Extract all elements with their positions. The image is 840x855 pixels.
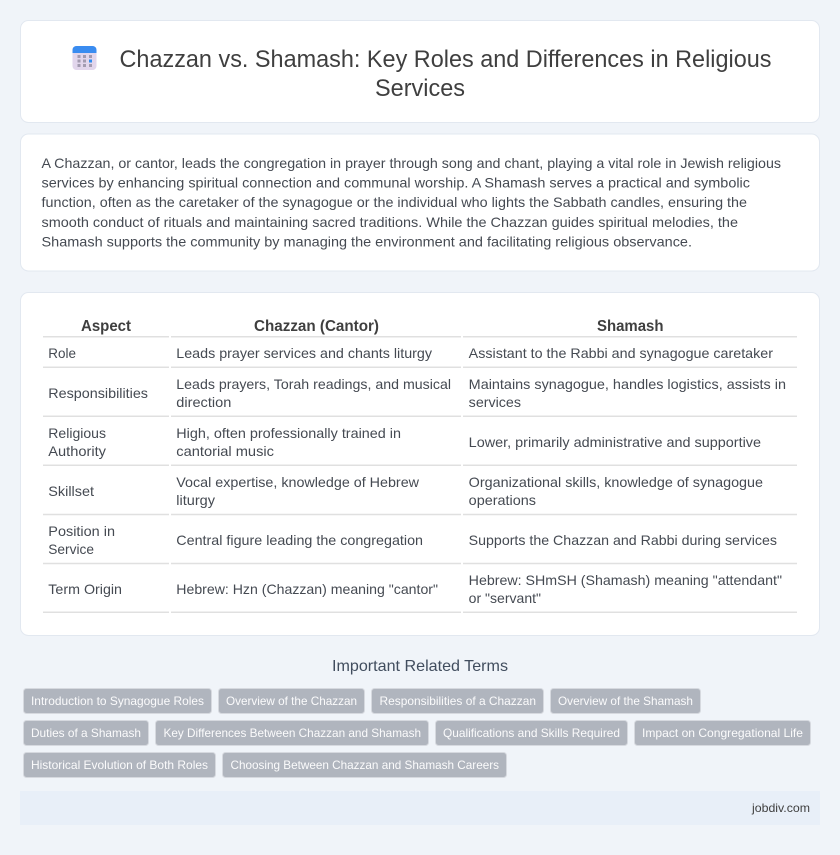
- summary text: smooth conduct of rituals and maintaining sacred traditions. While the Chazzan guides spiritual melodies, the: [42, 214, 738, 230]
- summary text: A Chazzan, or cantor, leads the congregation in prayer through song and chant, playing a vital role in Jewish religious: [42, 155, 781, 171]
- row: religious authority: Authority: [48, 443, 106, 459]
- related term chips: Historical Evolution of Both Roles: [31, 758, 208, 772]
- related term chips: Overview of the Shamash: [558, 694, 693, 708]
- row: religious authority: cantorial music: [176, 443, 274, 459]
- panel: title header: [20, 20, 820, 122]
- row: skillset: Skillset: [48, 483, 94, 499]
- summary text: Shamash supports the community by managing the environment and facilitating religious observance.: [42, 233, 692, 249]
- summary text: function, often as the caretaker of the synagogue or the individual who lights the Sabbath candles, ensuring the: [42, 194, 747, 210]
- table header row: Shamash: [597, 318, 664, 335]
- related term chips: Choosing Between Chazzan and Shamash Careers: [230, 758, 499, 772]
- row: term origin: Hebrew: SHmSH (Shamash) meaning "attendant": [469, 572, 782, 588]
- row: religious authority: [48, 425, 761, 459]
- row: position in service: Position in: [48, 523, 115, 539]
- row: responsibilities: Maintains synagogue, handles logistics, assists in: [469, 376, 786, 392]
- related term chips: Key Differences Between Chazzan and Shamash: [164, 726, 421, 740]
- summary text: [42, 155, 781, 249]
- related term chips: Overview of the Chazzan: [226, 694, 357, 708]
- footer bar: [20, 791, 820, 825]
- summary text: services by enhancing spiritual connection and communal worship. A Shamash serves a practical and symbolic: [42, 175, 750, 191]
- row: religious authority: Lower, primarily administrative and supportive: [469, 434, 761, 450]
- row: term origin: Term Origin: [48, 581, 122, 597]
- title: [120, 46, 772, 102]
- row: responsibilities: direction: [176, 394, 231, 410]
- row: responsibilities: [48, 376, 786, 410]
- row: skillset: Vocal expertise, knowledge of Hebrew: [176, 474, 420, 490]
- title: Services: [375, 75, 465, 102]
- related term chips: Qualifications and Skills Required: [443, 726, 620, 740]
- row: responsibilities: Leads prayers, Torah readings, and musical: [176, 376, 451, 392]
- panel: comparison table: [20, 292, 820, 636]
- title: Chazzan vs. Shamash: Key Roles and Differences in Religious: [120, 46, 772, 73]
- row: skillset: operations: [469, 492, 536, 508]
- row: religious authority: Religious: [48, 425, 106, 441]
- table header row: Aspect: [81, 318, 131, 335]
- related term chips: Impact on Congregational Life: [642, 726, 803, 740]
- footer bar: jobdiv.com: [751, 801, 810, 815]
- row: role: [48, 345, 773, 361]
- row: role: Assistant to the Rabbi and synagogue caretaker: [469, 345, 773, 361]
- row: term origin: Hebrew: Hzn (Chazzan) meaning "cantor": [176, 581, 438, 597]
- table header row: [81, 318, 664, 335]
- related term chips: [24, 688, 810, 778]
- row: religious authority: High, often professionally trained in: [176, 425, 401, 441]
- row: responsibilities: services: [469, 394, 521, 410]
- related term chips: Introduction to Synagogue Roles: [31, 694, 204, 708]
- row: responsibilities: Responsibilities: [48, 385, 148, 401]
- related term chips: Responsibilities of a Chazzan: [380, 694, 536, 708]
- row: position in service: Supports the Chazzan and Rabbi during services: [469, 532, 777, 548]
- row: position in service: [48, 523, 777, 557]
- row: term origin: [48, 572, 782, 606]
- row: skillset: [48, 474, 763, 508]
- row: position in service: Service: [48, 541, 94, 557]
- row: position in service: Central figure leading the congregation: [176, 532, 423, 548]
- heading: related terms: Important Related Terms: [332, 658, 508, 675]
- row: role: Role: [48, 345, 76, 361]
- table header row: Chazzan (Cantor): [254, 318, 379, 335]
- panel: summary paragraph: [20, 134, 820, 271]
- icon: calendar: [72, 46, 96, 70]
- related term chips: Duties of a Shamash: [31, 726, 141, 740]
- row: role: Leads prayer services and chants liturgy: [176, 345, 432, 361]
- row: term origin: or "servant": [469, 590, 541, 606]
- row: skillset: liturgy: [176, 492, 215, 508]
- row: skillset: Organizational skills, knowledge of synagogue: [469, 474, 763, 490]
